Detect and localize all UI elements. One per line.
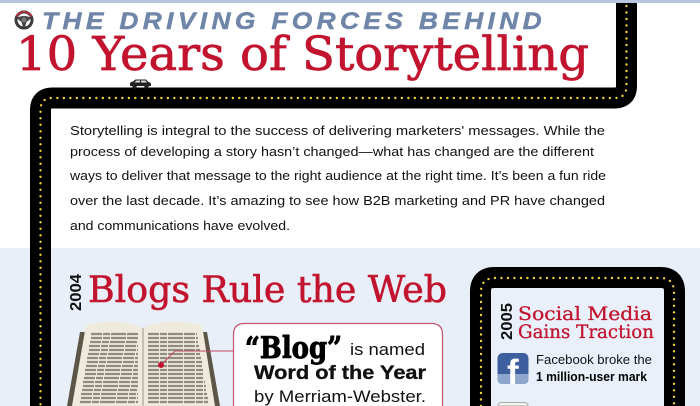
title: 10 years of storytelling: 10 Years of Storytelling xyxy=(16,27,589,82)
text: facebook milestone xyxy=(536,353,652,384)
text block: introduction: and communications have evolved. xyxy=(70,218,290,233)
icon: facebook: f xyxy=(507,353,519,392)
icon: facebook xyxy=(498,353,528,392)
text block: introduction: process of developing a story hasn’t changed—what has changed are the different xyxy=(70,144,594,159)
heading: social media gains traction: Social Media xyxy=(518,304,652,325)
text: facebook milestone: 1 million-user mark xyxy=(536,370,647,384)
callout: blog word of the year: “Blog” xyxy=(245,331,342,366)
callout: blog word of the year: by Merriam-Webster. xyxy=(254,387,426,406)
text block: introduction: ways to deliver that message to the right audience at the right time. It’s been a fun ride xyxy=(69,168,606,183)
heading: social media gains traction xyxy=(518,304,654,343)
icon: car on road xyxy=(130,80,151,89)
heading: social media gains traction: Gains Traction xyxy=(518,322,654,343)
callout: blog word of the year: Word of the Year xyxy=(254,362,426,384)
heading: the driving forces behind: THE DRIVING FORCES BEHIND xyxy=(42,8,546,35)
callout: blog word of the year xyxy=(234,324,442,406)
year label: 2004: 2004 xyxy=(68,274,85,311)
connector: book to callout xyxy=(158,351,234,368)
year label: 2005: 2005 xyxy=(499,303,516,340)
text block: introduction: over the last decade. It’s amazing to see how B2B marketing and PR have changed xyxy=(70,193,605,208)
panel: 2005 social media xyxy=(480,278,674,406)
icon: steering wheel xyxy=(16,12,32,28)
callout: blog word of the year: is named xyxy=(350,340,425,359)
text block: introduction xyxy=(69,123,606,233)
heading: blogs rule the web: Blogs Rule the Web xyxy=(88,270,447,311)
illustration: open book xyxy=(67,322,220,406)
text block: introduction: Storytelling is integral to the success of delivering marketers' messages. While the xyxy=(70,123,605,138)
icon: next service tile xyxy=(498,402,528,406)
text: facebook milestone: Facebook broke the xyxy=(536,353,652,367)
